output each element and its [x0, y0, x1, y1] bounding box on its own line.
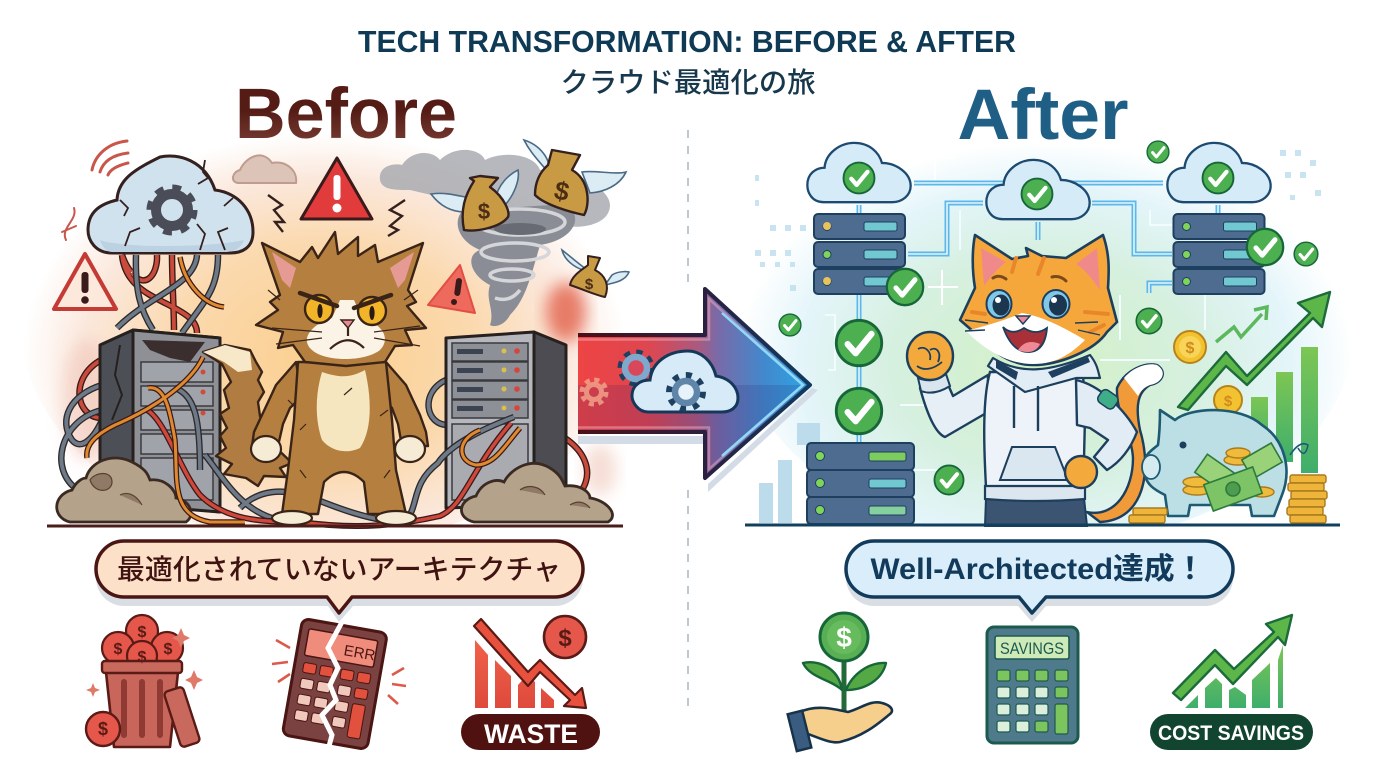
- tail: [203, 345, 292, 486]
- ground line: [745, 524, 1340, 526]
- wires in front of racks: [175, 388, 514, 522]
- icon: bottom server stack: [807, 443, 914, 524]
- fists: [907, 332, 1097, 488]
- icon: flying money bag 1: $: [478, 199, 490, 224]
- icon: hand growing money plant: [788, 613, 892, 751]
- snout & eye: [1142, 455, 1160, 479]
- nose and frown: [341, 320, 354, 328]
- icon: cracked cloud with gear: [88, 156, 253, 253]
- paws and feet: [251, 436, 425, 525]
- icon: savings calculator: SAVINGS: [1000, 639, 1064, 658]
- waist arm: [1076, 380, 1137, 470]
- icon: tornado: [380, 150, 610, 326]
- icon: trash can of coins: $: [98, 719, 108, 739]
- raised arm: [920, 375, 988, 437]
- icon: trash can of coins: $: [164, 641, 173, 658]
- whiskers: [965, 320, 1100, 335]
- icon: coin stacks: [1129, 475, 1327, 523]
- icon: savings calculator: [987, 627, 1078, 743]
- icon: waste chart with falling arrow: $: [558, 625, 572, 652]
- coin in slot: $: [1224, 393, 1233, 410]
- bar chart: green growth: [1251, 347, 1318, 473]
- head fur: [256, 232, 426, 366]
- panel: after scene: [745, 140, 1340, 526]
- glowing blue connectors: [859, 183, 1218, 443]
- icon: broken calculator: [272, 618, 406, 750]
- pixel data dots: [755, 150, 1321, 291]
- icon: cost savings chart: COST SAVINGS: [1158, 722, 1304, 745]
- illustration: happy orange cat in hoodie: [907, 235, 1163, 526]
- icon: trash can of coins: [86, 615, 203, 748]
- hood collar: [988, 355, 1100, 392]
- callout: before: 最適化されていないアーキテクチャ: [117, 554, 561, 585]
- icon: waste chart with falling arrow: WASTE: [484, 719, 578, 749]
- arrow: small trend: [1216, 307, 1267, 342]
- icon: waste chart with falling arrow: [461, 616, 600, 750]
- icon: server rack right: [446, 332, 566, 508]
- whiskers: [272, 326, 420, 346]
- arrow: big green trend: [1178, 292, 1330, 410]
- icon: cost savings chart: [1150, 615, 1313, 750]
- icon: flying money bag 2: [524, 140, 626, 215]
- transition arrow with cloud and gears: [578, 289, 818, 492]
- angry eyes: [300, 293, 391, 325]
- muzzle blaze: [307, 300, 385, 359]
- icon: warning triangle left: [54, 254, 116, 309]
- heading: Before: Before: [235, 75, 457, 154]
- gear faded: [582, 380, 606, 404]
- icon: flying money bag 2: $: [552, 175, 573, 207]
- sparkles: [917, 140, 958, 305]
- pants: [985, 498, 1087, 526]
- badge: [1096, 388, 1120, 411]
- inner ears: [981, 248, 1100, 290]
- illustration: angry scruffy cat: [203, 232, 428, 525]
- icon: piggy bank with money: [1142, 386, 1308, 516]
- icon: warning triangle centre: [301, 158, 372, 219]
- gear blue: [621, 353, 651, 383]
- hoodie: [984, 372, 1085, 487]
- banknotes inside: [1195, 443, 1282, 511]
- icon: dust pile left: [57, 458, 191, 522]
- icon: trash can of coins: $: [138, 649, 147, 666]
- callout: after: [846, 541, 1233, 622]
- white muzzle: [966, 313, 1085, 364]
- centre divider: [687, 130, 689, 712]
- faint bars: [759, 423, 820, 523]
- icon: status checks: [779, 141, 1318, 495]
- head with ears: [960, 235, 1117, 365]
- icon: right server stack: [1174, 214, 1264, 294]
- icon: trash can of coins: $: [114, 641, 123, 658]
- icon: broken calculator: ERR: [342, 642, 377, 664]
- icon: flying money bag 3: $: [585, 276, 594, 293]
- coins inside: [1183, 448, 1274, 497]
- heading: After: After: [958, 76, 1128, 155]
- fur ticks: [268, 290, 418, 478]
- wifi arcs: [62, 141, 128, 240]
- lightning squiggles: [268, 195, 405, 236]
- icon: warning triangle right: [428, 265, 475, 313]
- icon: flying money bag 3: [562, 250, 629, 297]
- icon: clouds with checks: [807, 143, 1271, 219]
- background glow: before scene: [37, 144, 622, 524]
- pocket and strings: [1000, 447, 1068, 480]
- icon: small background cloud: [233, 155, 296, 183]
- eyes: [986, 290, 1070, 318]
- background glow: after scene: [758, 156, 1336, 527]
- cloud gear: [669, 375, 703, 409]
- coin: $: [1186, 340, 1195, 357]
- cloud: [632, 351, 738, 412]
- tail: [1087, 364, 1163, 522]
- panel: before scene: [47, 140, 629, 526]
- coin in slot: [1214, 386, 1242, 414]
- pig: [1143, 410, 1286, 516]
- arms: [252, 362, 302, 446]
- wires behind racks: [79, 255, 587, 512]
- icon: hand growing money plant: $: [836, 622, 852, 653]
- title: クラウド最適化の旅: [560, 67, 816, 98]
- torso and legs: [282, 362, 406, 514]
- title: [358, 24, 1016, 98]
- ground line: [47, 524, 623, 528]
- nose and open mouth: [1016, 316, 1030, 324]
- callout: after: Well-Architected達成！: [870, 553, 1206, 586]
- icon: flying money bag 1: [431, 170, 518, 230]
- coin: [1174, 331, 1206, 363]
- icon: broken server rack left: [100, 330, 220, 512]
- icon: left server stack: [814, 214, 905, 294]
- dust shading: [90, 474, 590, 508]
- title: TECH TRANSFORMATION: BEFORE & AFTER: [358, 24, 1016, 59]
- callout: before: [96, 541, 583, 622]
- brows and stripes: [993, 276, 1066, 281]
- belly: [317, 370, 370, 451]
- pale circuit lines: [825, 210, 1205, 470]
- icon: dust pile right: [461, 463, 613, 522]
- ears inner: [272, 252, 414, 288]
- icon: trash can of coins: $: [138, 624, 147, 641]
